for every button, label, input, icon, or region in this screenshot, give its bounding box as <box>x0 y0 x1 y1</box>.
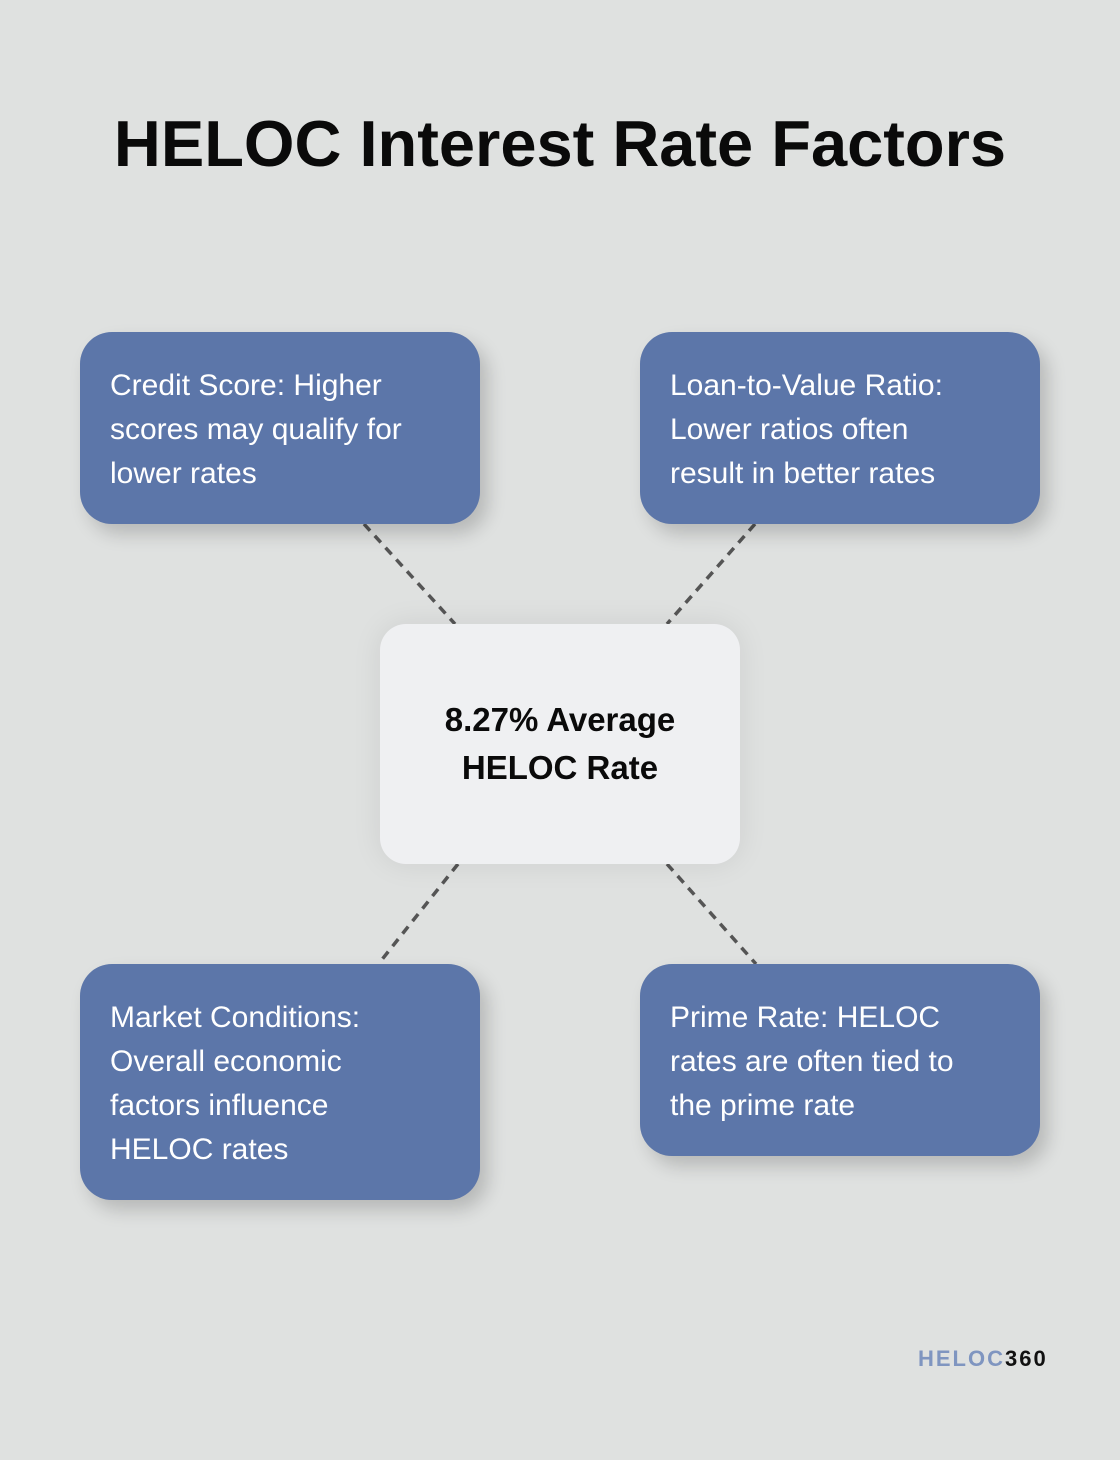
panel: loan-to-value: Loan-to-Value Ratio: <box>670 369 943 402</box>
panel: credit score: scores may qualify for <box>110 413 402 446</box>
panel: credit score: Credit Score: Higher <box>110 369 382 402</box>
panel: loan-to-value <box>640 332 1040 524</box>
panel: prime rate: rates are often tied to <box>670 1045 954 1078</box>
title: HELOC Interest Rate Factors <box>114 107 1006 180</box>
panel: loan-to-value: Lower ratios often <box>670 413 908 446</box>
panel: prime rate <box>640 964 1040 1156</box>
logo: HELOC360 <box>918 1346 1048 1371</box>
panel: credit score: lower rates <box>110 457 257 490</box>
panel: market conditions: factors influence <box>110 1089 328 1122</box>
panel: prime rate: the prime rate <box>670 1089 855 1122</box>
panel: loan-to-value: result in better rates <box>670 457 935 490</box>
center: average rate: HELOC Rate <box>462 749 658 786</box>
panel: market conditions: HELOC rates <box>110 1133 288 1166</box>
panel: market conditions: Overall economic <box>110 1045 342 1078</box>
panel: prime rate: Prime Rate: HELOC <box>670 1001 940 1034</box>
panel: market conditions <box>80 964 480 1200</box>
center: average rate: 8.27% Average <box>445 701 675 738</box>
panel: credit score <box>80 332 480 524</box>
center: average rate <box>380 624 740 864</box>
panel: market conditions: Market Conditions: <box>110 1001 360 1034</box>
